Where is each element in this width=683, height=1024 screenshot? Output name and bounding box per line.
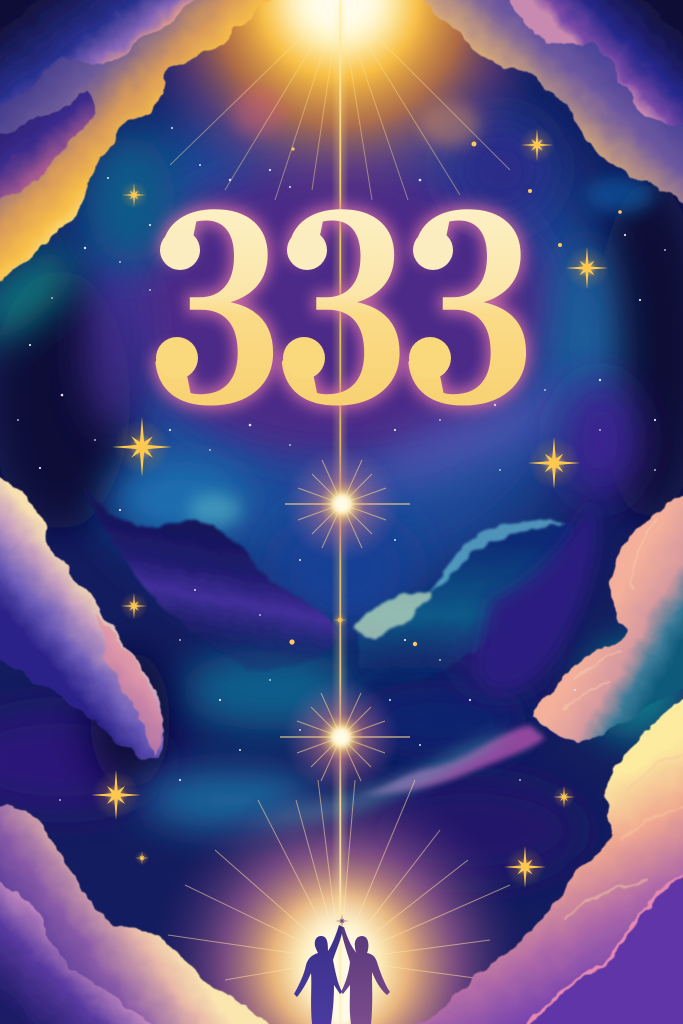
two figures reaching up <box>294 914 390 1024</box>
star on beam small <box>332 612 348 628</box>
cloud: top right <box>408 0 683 212</box>
star bottom right <box>504 846 546 888</box>
bright flare lower on beam <box>280 679 410 795</box>
star lower left <box>120 592 148 620</box>
large sparkle stars <box>91 127 609 888</box>
ball terminals <box>156 230 453 379</box>
sunburst at top <box>100 0 580 230</box>
sparkle above joined hands <box>335 914 349 928</box>
cloud: center left dark <box>82 488 334 670</box>
glow around figures <box>130 775 550 1024</box>
golden dust <box>289 142 622 646</box>
star left middle <box>112 417 172 477</box>
central vertical light beam <box>335 0 345 1024</box>
star right of number <box>565 246 609 290</box>
cloud: middle right peach <box>532 488 683 745</box>
star small bottom right <box>553 786 575 808</box>
cloud: top left <box>0 0 285 290</box>
bright flare upper on beam <box>284 446 410 562</box>
star bottom left <box>91 770 141 820</box>
cloud: bottom left <box>0 806 285 1024</box>
cloud: bottom right <box>400 692 683 1024</box>
digit glow: 333 <box>147 113 538 472</box>
cloud: center right teal <box>354 500 596 690</box>
star right middle <box>528 437 580 489</box>
star upper right <box>519 127 555 163</box>
scattered small stars <box>17 127 666 801</box>
figure right <box>341 927 390 1024</box>
nebula streak to magenta <box>250 725 545 825</box>
figure left <box>294 925 343 1024</box>
number 333 <box>147 113 538 472</box>
cloud: middle left <box>0 472 164 760</box>
digit face: 333 <box>147 113 538 472</box>
star upper left <box>120 181 148 209</box>
star small bottom left <box>135 851 149 865</box>
